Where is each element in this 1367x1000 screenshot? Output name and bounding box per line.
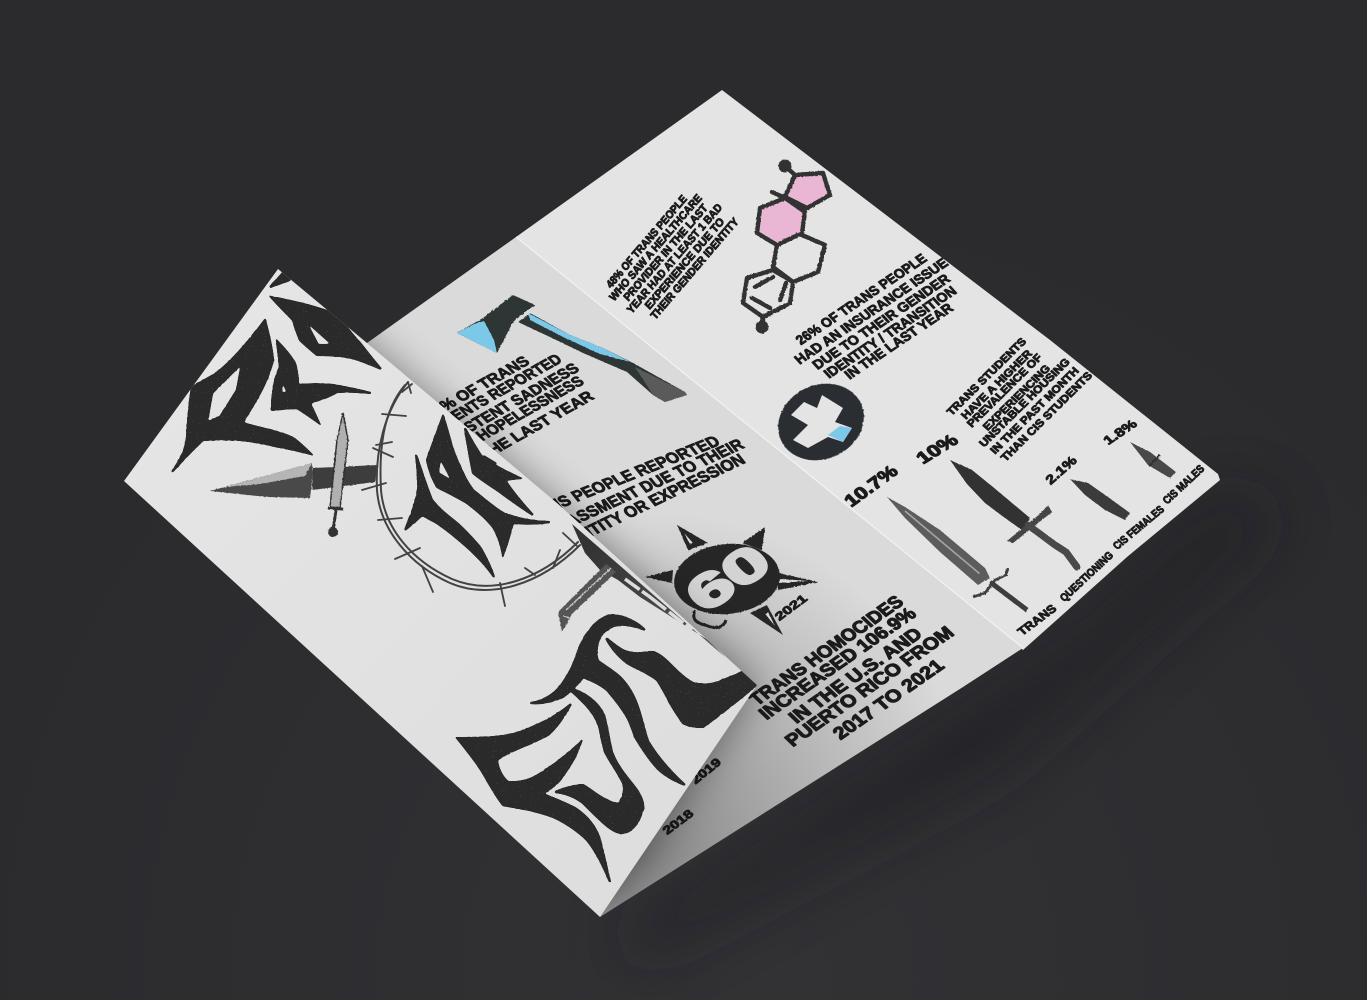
- statistic: persistent sadness: OR HOPELESSNESS: [451, 374, 588, 457]
- statistic: healthcare provider bad experience: THEIR GENDER IDENTITY: [649, 215, 742, 322]
- statistic: trans homicides: IN THE U.S. AND: [785, 625, 927, 727]
- statistic: trans homicides: INCREASED 106.9%: [755, 604, 921, 724]
- panel: right panel of the brochure: [516, 90, 1220, 650]
- icon: small sword: [328, 413, 348, 537]
- statistic: insurance issue: IN THE LAST YEAR: [841, 300, 956, 382]
- statistic: healthcare provider bad experience: EXPERIENCE DUE TO: [643, 215, 727, 312]
- statistic: unstable housing: TRANS STUDENTS: [945, 336, 1029, 418]
- statistic: healthcare provider bad experience: PROVIDER IN THE LAST: [622, 202, 710, 304]
- lettering: TR: [405, 416, 550, 577]
- icon: spiked ball with 60: [645, 525, 818, 635]
- year label: 2018: 2018: [659, 807, 697, 837]
- statistic: harassment: IDENTITY OR EXPRESSION: [551, 451, 749, 554]
- icon: spear: [210, 463, 378, 498]
- infographic: folded brochure mockup on a dark surface: [124, 90, 1220, 917]
- chart: dagger bar chart of housing instability: [840, 416, 1207, 638]
- ground shadow under brochure: [620, 490, 1280, 960]
- statistic: trans homicides: TRANS HOMOCIDES: [746, 592, 908, 710]
- statistic: harassment: HARASSMENT DUE TO THEIR: [531, 436, 748, 544]
- statistic: unstable housing: HAVE A HIGHER: [959, 348, 1035, 422]
- icon: medical cross in circle: [765, 370, 877, 474]
- statistic: unstable housing: UNSTABLE HOUSING: [977, 356, 1073, 450]
- chart value: 2.1%: 2.1%: [1042, 452, 1080, 487]
- chart value: 10.7%: 10.7%: [840, 461, 902, 511]
- statistic: persistent sadness: PERSISTENT SADNESS: [421, 361, 583, 458]
- statistic: insurance issue: HAD AN INSURANCE ISSUE: [791, 255, 951, 367]
- statistic: healthcare provider bad experience: YEAR HAD AT LEAST 1 BAD: [625, 202, 725, 316]
- panel: front flap with decorative lettering: [124, 269, 757, 917]
- axis label: cis females: CIS FEMALES: [1111, 504, 1167, 552]
- statistic: unstable housing: IN THE PAST MONTH: [988, 365, 1082, 457]
- statistic: trans homicides: PUERTO RICO FROM: [781, 623, 959, 751]
- flap cast shadow on middle panel: [367, 328, 770, 916]
- axis label: cis males: CIS MALES: [1161, 463, 1207, 507]
- panel: middle panel of the brochure: [300, 237, 1023, 917]
- bar: questioning sword: [950, 460, 1077, 567]
- bar: trans sword: [887, 497, 1027, 610]
- year label: 2019: 2019: [688, 755, 724, 787]
- icon: hormone molecule: [743, 160, 830, 334]
- chart value: 1.8%: 1.8%: [1100, 416, 1141, 447]
- chart value: 10%: 10%: [912, 431, 962, 467]
- icon: large sword: [558, 524, 725, 657]
- statistic: insurance issue: IDENTITY / TRANSITION: [820, 283, 960, 381]
- axis label: questioning: QUESTIONING: [1058, 550, 1116, 604]
- statistic: unstable housing: THAN CIS STUDENTS: [999, 370, 1095, 464]
- statistic: unstable housing: EXPERIENCING: [981, 363, 1053, 433]
- statistic: insurance issue: DUE TO THEIR GENDER: [809, 271, 953, 372]
- axis label: trans: TRANS: [1014, 602, 1060, 638]
- icon: barbed wire: [362, 382, 580, 606]
- lettering: PRO: [172, 273, 381, 472]
- icon: spiked ball with 60: 60: [674, 534, 782, 622]
- statistic: trans homicides: 2017 TO 2021: [829, 656, 949, 744]
- statistic: trans homicides: [746, 592, 959, 751]
- bar: cis females knife: [1070, 479, 1130, 520]
- bar: cis males knife: [1130, 442, 1176, 478]
- statistic: healthcare provider bad experience: 48% OF TRANS PEOPLE: [604, 193, 690, 291]
- statistic: insurance issue: 26% OF TRANS PEOPLE: [792, 251, 930, 347]
- statistic: harassment: TRANS PEOPLE REPORTED: [513, 433, 724, 527]
- lettering: FUL: [457, 615, 757, 882]
- icon: axe: [457, 295, 687, 402]
- statistic: persistent sadness: % OF TRANS: [437, 354, 534, 414]
- year label: 2021: 2021: [772, 591, 811, 623]
- statistic: unstable housing: [945, 336, 1095, 464]
- statistic: unstable housing: PREVALENCE OF: [965, 352, 1045, 430]
- statistic: healthcare provider bad experience: WHO SAW A HEALTHCARE: [607, 192, 705, 304]
- statistic: persistent sadness: STUDENTS REPORTED: [414, 352, 566, 443]
- statistic: persistent sadness: IN THE LAST YEAR: [458, 389, 598, 473]
